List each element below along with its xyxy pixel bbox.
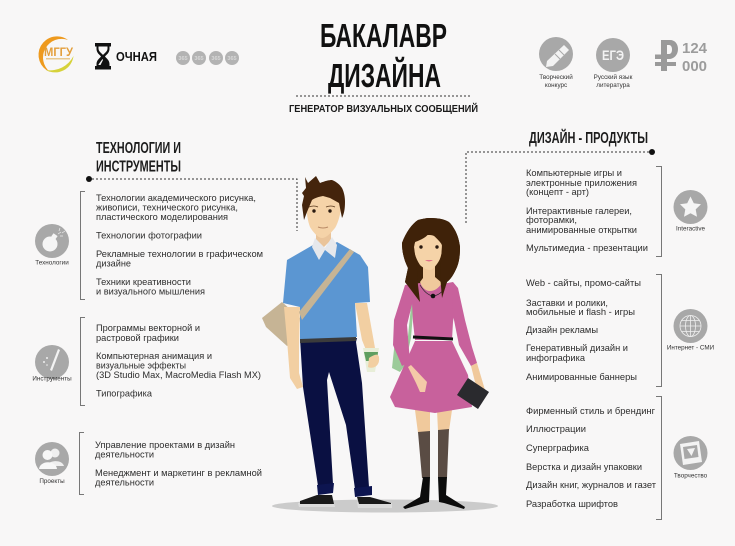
woman: right sleeve bbox=[452, 282, 477, 366]
man: shoes bbox=[298, 495, 392, 508]
icon: brush bbox=[35, 345, 69, 379]
woman: front hair bbox=[402, 218, 460, 302]
woman: legs bbox=[415, 410, 452, 433]
list: creativity: Фирменный стиль и брендинг bbox=[526, 406, 656, 417]
icons: 365 days: 365 bbox=[211, 56, 221, 62]
woman: face bbox=[414, 235, 442, 270]
label: internet and media: Интернет - СМИ bbox=[667, 344, 715, 352]
label: projects: Проекты bbox=[39, 478, 65, 485]
woman: eyes and mouth bbox=[419, 245, 439, 262]
icons: 365 days: 365 bbox=[227, 56, 237, 62]
list: tools: растровой графики bbox=[96, 333, 179, 344]
man: trouser cuffs bbox=[317, 483, 372, 497]
woman: hair back bbox=[402, 218, 460, 302]
figure: woman bbox=[390, 218, 489, 509]
title: ДИЗАЙНА bbox=[328, 56, 441, 94]
list: projects: Менеджмент и маркетинг в рекламной bbox=[95, 468, 262, 479]
list: tools: Компьютерная анимация и bbox=[96, 351, 212, 362]
list: projects: Управление проектами в дизайн bbox=[95, 440, 235, 451]
list: interactive: фоторамки, bbox=[526, 215, 577, 226]
heading: design products: ДИЗАЙН - ПРОДУКТЫ bbox=[529, 129, 648, 147]
list: technologies bbox=[96, 193, 263, 298]
list: creativity bbox=[526, 406, 657, 510]
icon: rouble sign bbox=[655, 40, 678, 71]
list: technologies: Технологии академического рисунка, bbox=[96, 193, 256, 204]
woman: belt bbox=[413, 337, 453, 339]
list: creativity: Разработка шрифтов bbox=[526, 499, 618, 510]
list: creativity: Верстка и дизайн упаковки bbox=[526, 462, 642, 473]
icon: EGE exam: ЕГЭ bbox=[602, 47, 624, 63]
label: exam subjects: Русский язык bbox=[594, 73, 633, 81]
label: exam subjects bbox=[594, 73, 633, 89]
price bbox=[682, 41, 707, 75]
woman: forearm bbox=[471, 363, 485, 397]
label: tools: Инструменты bbox=[32, 376, 72, 382]
title: БАКАЛАВР bbox=[320, 17, 447, 54]
list: technologies: пластического моделирования bbox=[96, 212, 228, 223]
connector: right heading to figure bbox=[466, 149, 655, 224]
label: creative contest: Творческий bbox=[539, 73, 573, 81]
man: neck bbox=[316, 226, 331, 248]
list: interactive: анимированные открытки bbox=[526, 225, 637, 236]
list: projects: деятельности bbox=[95, 450, 154, 460]
man: right arm bbox=[355, 303, 375, 350]
panel: tools bbox=[32, 318, 261, 406]
label: creative contest bbox=[539, 73, 573, 89]
list: interactive: Интерактивные галереи, bbox=[526, 206, 632, 217]
man: shirt bbox=[283, 242, 370, 339]
label: interactive: Interactive bbox=[676, 226, 706, 232]
icons: 365 days: 365 bbox=[178, 56, 188, 62]
connector: left heading to figure bbox=[86, 176, 297, 231]
woman: boots bbox=[403, 477, 465, 509]
list: internet and media: Дизайн рекламы bbox=[526, 325, 598, 336]
list: tools: визуальные эффекты bbox=[96, 360, 186, 372]
list: technologies: Рекламные технологии в графическом bbox=[96, 249, 263, 260]
woman: neck bbox=[420, 266, 442, 291]
man: bag strap bbox=[299, 249, 354, 320]
list: interactive: Компьютерные игры и bbox=[526, 168, 622, 179]
list: interactive: Мультимедиа - презентации bbox=[526, 243, 648, 254]
icon: creative contest pencil bbox=[539, 37, 573, 71]
list: projects: деятельности bbox=[95, 478, 154, 488]
list: internet and media bbox=[526, 278, 641, 383]
label: exam subjects: литература bbox=[596, 82, 630, 89]
list: projects bbox=[95, 440, 262, 488]
label: technologies: Технологии bbox=[35, 260, 69, 266]
study format label: ОЧНАЯ bbox=[116, 49, 157, 64]
list: creativity: Дизайн книг, журналов и газет bbox=[526, 480, 657, 491]
icon: people bbox=[35, 442, 69, 476]
ground shadow bbox=[272, 500, 498, 512]
man: collar bbox=[312, 237, 337, 260]
list: internet and media: Генеративный дизайн и bbox=[526, 343, 628, 354]
list: tools: (3D Studio Max, MacroMedia Flash MX) bbox=[96, 370, 261, 381]
man: left arm bbox=[284, 307, 303, 389]
label: creative contest: конкурс bbox=[545, 82, 567, 89]
woman: stockings bbox=[418, 429, 449, 478]
woman: skirt bbox=[390, 341, 472, 413]
heading: technologies and tools: ТЕХНОЛОГИИ И bbox=[96, 140, 181, 157]
icon: globe bbox=[674, 309, 708, 343]
panel: technologies bbox=[35, 192, 263, 300]
heading: technologies and tools bbox=[96, 140, 181, 176]
woman: clutch bbox=[457, 378, 489, 409]
list: internet and media: мобильные и flash - игры bbox=[526, 307, 635, 318]
man: hair bbox=[302, 176, 345, 220]
icons: 365 days: 365 bbox=[194, 56, 204, 62]
list: technologies: Техники креативности bbox=[96, 277, 191, 288]
list: internet and media: Анимированные баннеры bbox=[526, 372, 637, 383]
subtitle: ГЕНЕРАТОР ВИЗУАЛЬНЫХ СООБЩЕНИЙ bbox=[289, 102, 478, 115]
woman: bodice bbox=[405, 282, 456, 340]
list: technologies: Технологии фотографии bbox=[96, 230, 202, 242]
man: bag bbox=[262, 302, 300, 346]
man: coffee cup bbox=[363, 348, 379, 372]
icon: bomb bbox=[35, 224, 69, 258]
panel: interactive bbox=[526, 166, 708, 256]
list: technologies: живописи, технического рисунка, bbox=[96, 202, 238, 214]
woman: hand on skirt bbox=[408, 365, 427, 392]
list: interactive: (концепт - арт) bbox=[526, 187, 589, 198]
logo: university bbox=[39, 36, 74, 72]
list: creativity: Суперграфика bbox=[526, 443, 590, 454]
list: tools: Типографика bbox=[96, 388, 153, 400]
icon: star bbox=[674, 190, 708, 224]
list: internet and media: Web - сайты, промо-сайты bbox=[526, 278, 641, 289]
icon: photo bbox=[674, 436, 708, 470]
list: interactive bbox=[526, 168, 648, 254]
icon: EGE exam bbox=[596, 38, 630, 72]
heading: technologies and tools: ИНСТРУМЕНТЫ bbox=[96, 158, 181, 176]
list: technologies: дизайне bbox=[96, 258, 131, 270]
man: face bbox=[306, 193, 341, 238]
list: internet and media: инфографика bbox=[526, 353, 586, 364]
price: 000 bbox=[682, 59, 707, 75]
list: interactive: электронные приложения bbox=[526, 178, 637, 189]
woman: necklace bbox=[420, 285, 445, 298]
price: 124 bbox=[682, 41, 707, 57]
panel: internet and media bbox=[526, 274, 715, 386]
title bbox=[320, 17, 447, 94]
list: creativity: Иллюстрации bbox=[526, 424, 586, 435]
list: tools: Программы векторной и bbox=[96, 323, 200, 334]
list: tools bbox=[96, 323, 261, 400]
list: internet and media: Заставки и ролики, bbox=[526, 298, 608, 309]
panel: projects bbox=[35, 432, 262, 494]
woman: left sleeve bbox=[393, 285, 414, 366]
man: trousers bbox=[300, 338, 369, 489]
figure: man bbox=[262, 176, 392, 508]
logo: university: МГГУ bbox=[44, 45, 73, 59]
label: creativity: Творчество bbox=[674, 472, 708, 480]
icons: 365 days bbox=[176, 51, 239, 65]
icon: hourglass bbox=[95, 43, 111, 70]
woman: green bag bbox=[392, 297, 414, 372]
list: technologies: и визуального мышления bbox=[96, 286, 205, 298]
man: belt bbox=[300, 334, 356, 343]
man: eyes and mouth bbox=[309, 206, 335, 228]
panel: creativity bbox=[526, 396, 708, 520]
